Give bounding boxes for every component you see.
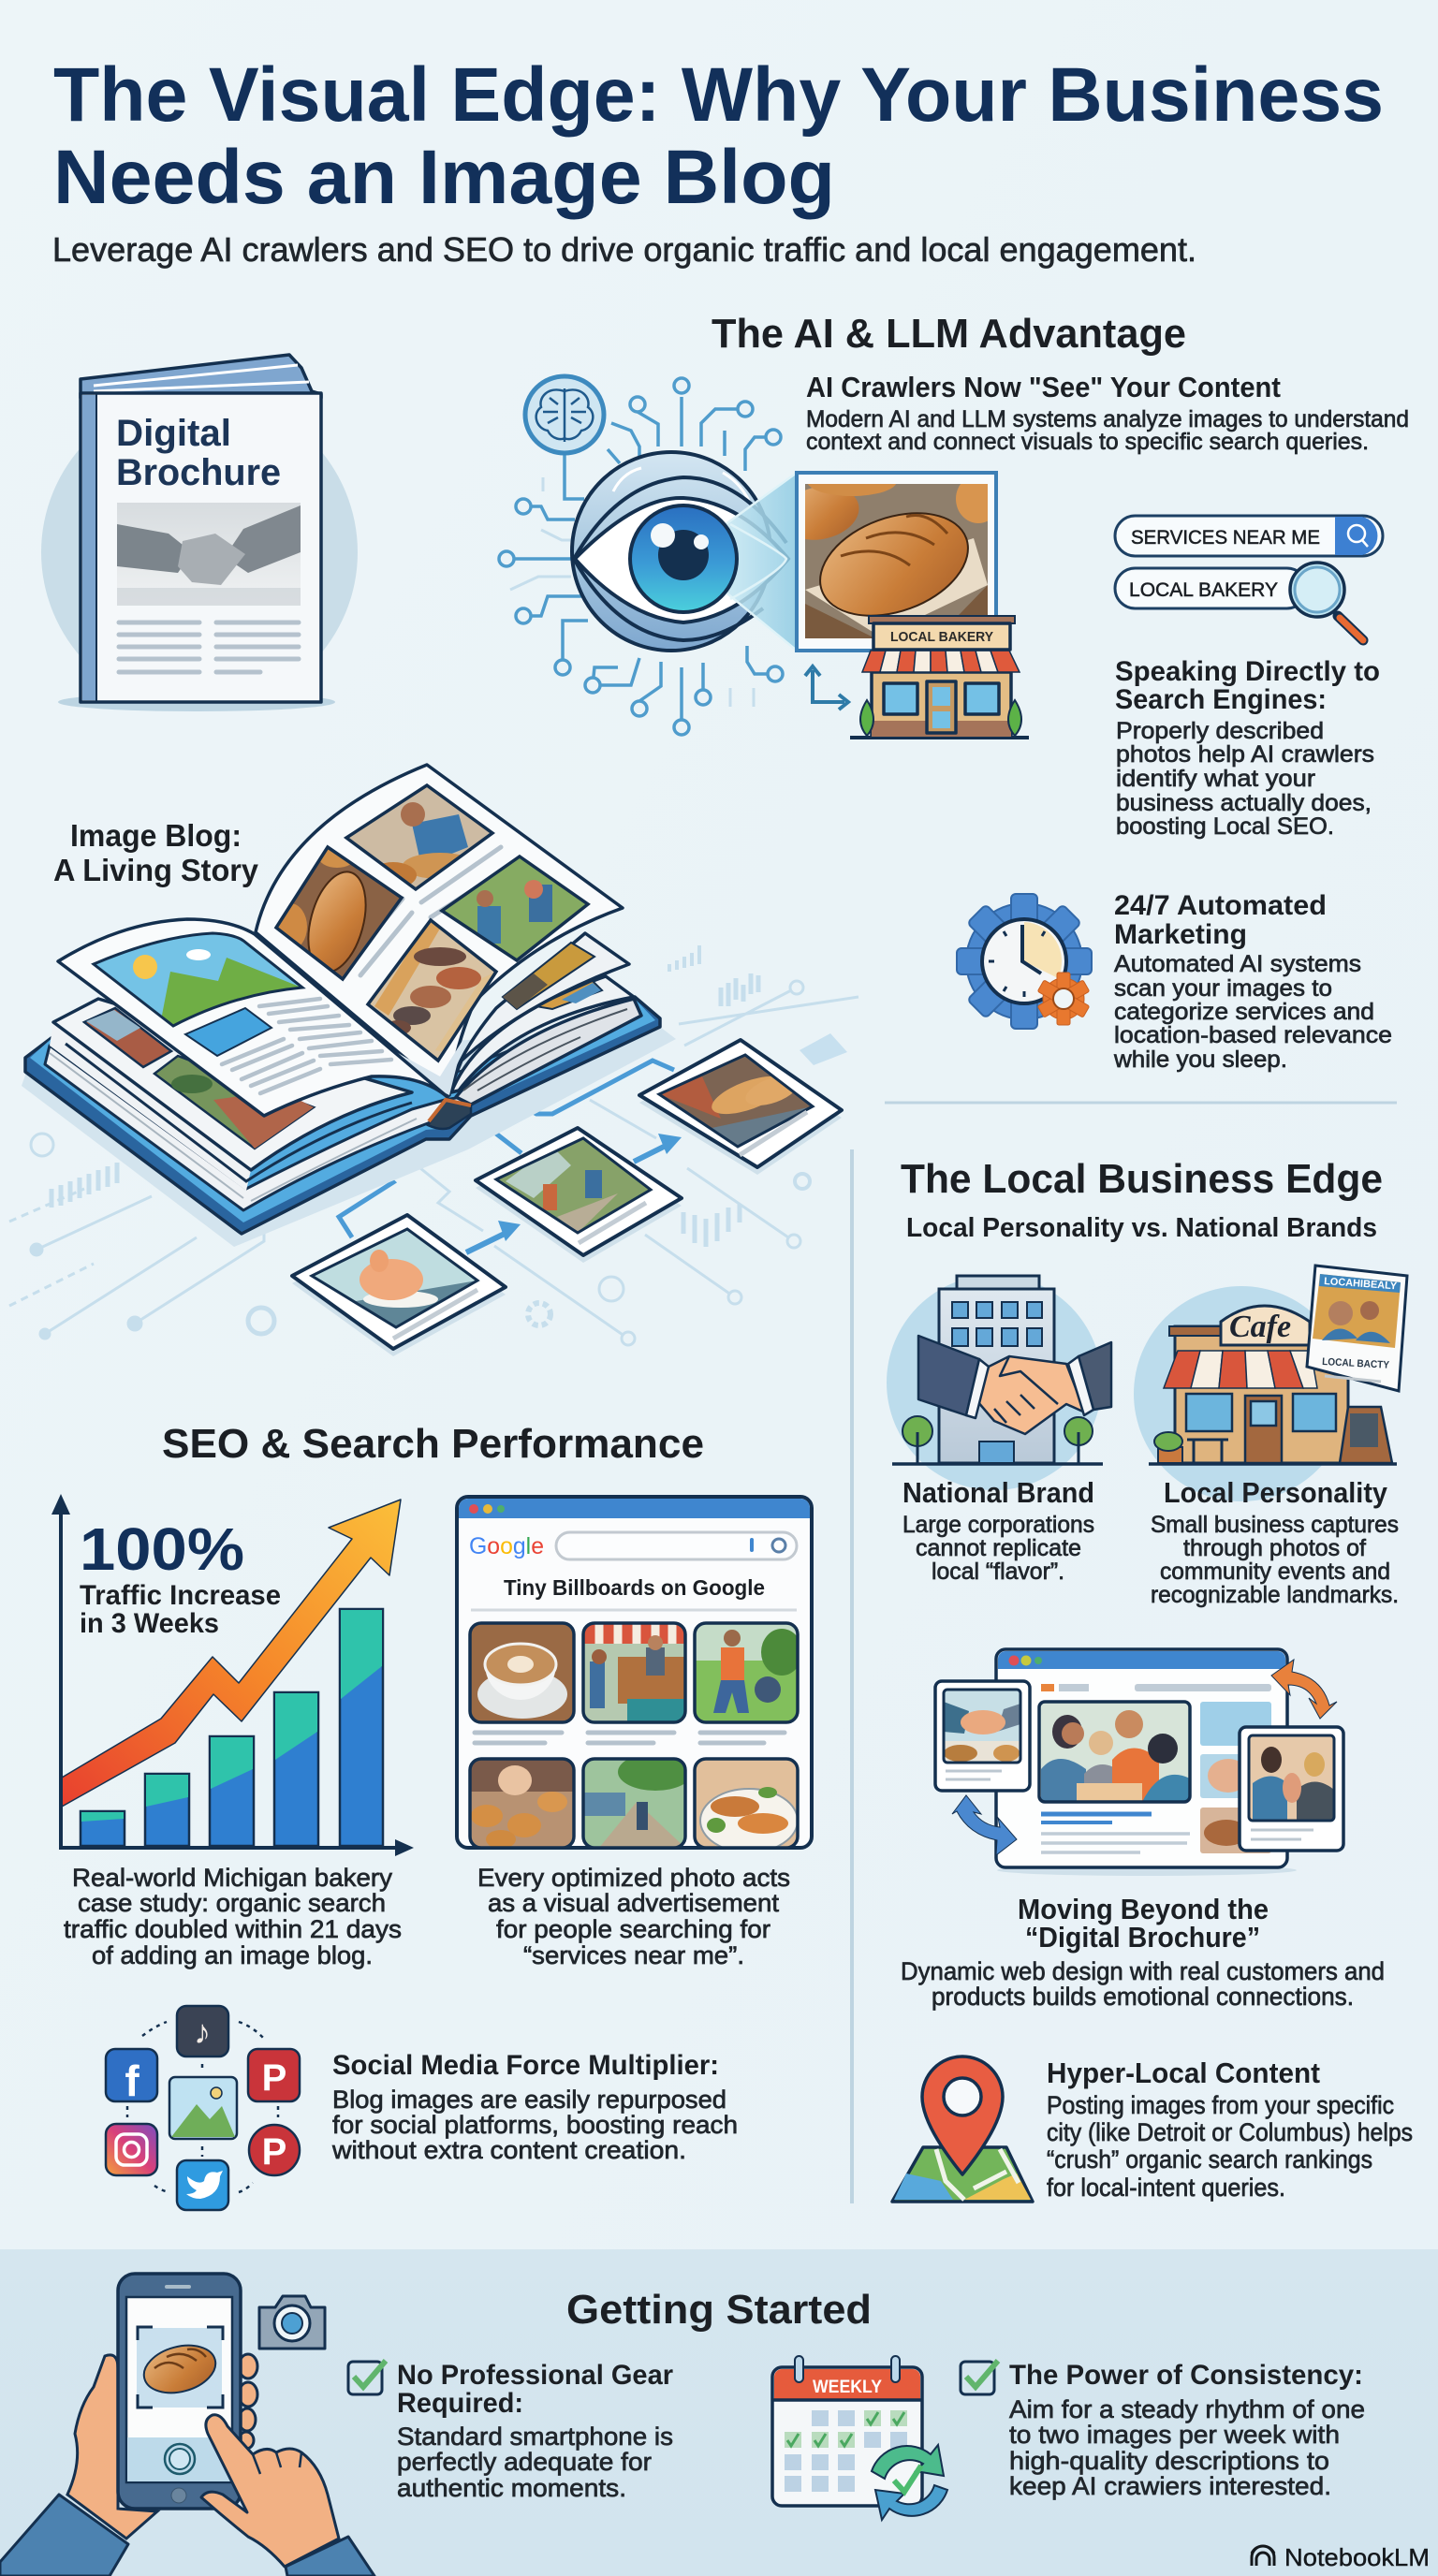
no professional gear text: authentic moments.: [397, 2474, 626, 2502]
checkbox: gear: [348, 2361, 386, 2394]
power of consistency text: Aim for a steady rhythm of one: [1009, 2395, 1365, 2423]
photo: baker: [346, 785, 492, 889]
speaking directly text: [1115, 656, 1380, 840]
icon: pinterest square: P: [262, 2057, 286, 2099]
social text: for social platforms, boosting reach: [332, 2111, 738, 2139]
digital brochure illustration: [41, 355, 358, 711]
hyper-local text: [1047, 2056, 1413, 2202]
local personality text: Local Personality: [1164, 1476, 1388, 1509]
24/7 text: Automated AI systems: [1114, 951, 1361, 977]
image card: bread on table: [639, 1040, 842, 1175]
moving beyond text: Moving Beyond the: [1018, 1893, 1269, 1925]
handshake: [918, 1336, 1111, 1434]
light beam to photo: [701, 473, 797, 651]
heading: local business edge: The Local Business Edge: [901, 1156, 1383, 1202]
chart caption: Real-world Michigan bakery: [72, 1864, 393, 1892]
photo: pastries: [470, 1759, 574, 1849]
image blog open book illustration: [22, 765, 676, 1247]
dynamic website illustration: [935, 1649, 1343, 1876]
image blog label: Image Blog:: [70, 818, 242, 853]
book cover: [25, 997, 660, 1234]
weekly calendar icon: [772, 2356, 947, 2520]
moving beyond text: “Digital Brochure”: [1025, 1921, 1260, 1954]
speaking directly text: identify what your: [1116, 766, 1315, 792]
bars: [81, 1609, 383, 1846]
sky photo: [96, 934, 300, 1024]
subtitle: Leverage AI crawlers and SEO to drive organic traffic and local engagement.: [52, 230, 1196, 269]
Google browser mockup: Tiny Billboards on Google: [504, 1575, 765, 1600]
search pills: [1115, 516, 1383, 640]
page block: [45, 999, 641, 1210]
AI eye illustration with circuits: [499, 376, 797, 735]
stat: 100%: [80, 1515, 244, 1583]
local personality text: [1151, 1476, 1399, 1608]
local bakery storefront: LOCAL BAKERY: [890, 629, 993, 645]
chart caption: [64, 1864, 402, 1969]
title: The Visual Edge: Why Your Business: [53, 52, 1384, 138]
heading: local business edge: Local Personality vs. National Brands: [906, 1213, 1377, 1243]
spine: [428, 1100, 471, 1129]
heading: AI and LLM advantage: The AI & LLM Advantage: [712, 311, 1186, 357]
power of consistency text: [1009, 2360, 1365, 2500]
national brand text: local “flavor”.: [932, 1559, 1064, 1585]
no professional gear text: Required:: [397, 2388, 523, 2419]
brochure title: Brochure: [116, 452, 281, 493]
brochure title: Digital: [116, 413, 231, 454]
iris: [630, 505, 737, 612]
power of consistency text: The Power of Consistency:: [1009, 2360, 1363, 2391]
24/7 text: [1113, 890, 1392, 1073]
chart caption: case study: organic search: [78, 1889, 386, 1917]
browser caption: [477, 1864, 790, 1969]
photo: market stall: [583, 1623, 685, 1722]
speaking directly text: boosting Local SEO.: [1116, 813, 1334, 840]
moving beyond text: [901, 1893, 1385, 2011]
no professional gear text: [397, 2360, 673, 2502]
speaking directly text: business actually does,: [1116, 790, 1372, 816]
24/7 text: location-based relevance: [1114, 1022, 1392, 1048]
stat: [80, 1515, 281, 1639]
photo: garden: [442, 856, 588, 960]
browser caption: for people searching for: [496, 1915, 770, 1943]
magnifier icon: [1290, 563, 1363, 640]
social text: [331, 2050, 738, 2164]
icon: facebook: f: [125, 2056, 139, 2105]
icon: pinterest square: [248, 2049, 300, 2101]
poster: LOCAHIBEALY: [1324, 1276, 1398, 1292]
checkbox: consistency: [961, 2361, 998, 2394]
24/7 text: while you sleep.: [1113, 1046, 1287, 1073]
heading: getting started: Getting Started: [566, 2287, 872, 2333]
chart caption: of adding an image blog.: [92, 1941, 373, 1969]
24/7 text: categorize services and: [1114, 999, 1374, 1025]
social text: Social Media Force Multiplier:: [332, 2050, 719, 2081]
national brand illustration: [887, 1275, 1111, 1490]
heading: SEO: SEO & Search Performance: [162, 1421, 704, 1467]
brain icon: [525, 376, 604, 453]
photo: street: [584, 1760, 683, 1846]
title: [53, 52, 1384, 220]
brochure title: [116, 413, 281, 493]
phone in hands illustration: [0, 2274, 374, 2576]
panel: getting started: [0, 2249, 1438, 2576]
AI crawlers text: AI Crawlers Now "See" Your Content: [806, 371, 1281, 403]
arrow to storefront: [805, 666, 848, 710]
photo: plated food: [697, 1760, 796, 1846]
image blog label: A Living Story: [53, 853, 259, 887]
upper left page: [58, 919, 448, 1116]
search pills: LOCAL BAKERY: [1129, 579, 1278, 601]
bread photo: [139, 2338, 221, 2400]
local bakery storefront: [850, 616, 1029, 738]
lower left page with photos: [53, 999, 412, 1170]
national brand text: cannot replicate: [916, 1535, 1081, 1561]
axes: [61, 1507, 403, 1848]
photo: bread: [278, 850, 399, 977]
bread photo frame: [795, 471, 998, 652]
map pin icon: [892, 2056, 1033, 2202]
right page stack: [456, 999, 641, 1105]
hyper-local text: Posting images from your specific: [1047, 2091, 1394, 2119]
icon: instagram: [106, 2124, 157, 2175]
stat: Traffic Increase: [80, 1580, 281, 1611]
weekly calendar icon: WEEKLY: [813, 2378, 882, 2397]
right card: [1240, 1727, 1343, 1851]
main customer photo: [1039, 1702, 1190, 1802]
local personality text: through photos of: [1183, 1535, 1366, 1561]
icon: tiktok: ♪: [194, 2012, 211, 2051]
24/7 text: scan your images to: [1114, 975, 1332, 1002]
image card: outdoor scene: [476, 1128, 682, 1263]
browser caption: “services near me”.: [523, 1941, 744, 1969]
poster: LOCAL BACTY: [1322, 1356, 1390, 1371]
heading: local business edge: [901, 1156, 1383, 1243]
cafe sign: Cafe: [1229, 1310, 1291, 1344]
eyeball: [572, 452, 788, 651]
lower photo one: [84, 1008, 171, 1067]
AI crawlers text: [806, 371, 1409, 455]
sync arrows: [872, 2445, 947, 2520]
AI crawlers text: Modern AI and LLM systems analyze images to understand: [806, 406, 1409, 432]
national brand text: National Brand: [902, 1476, 1094, 1509]
power of consistency text: keep AI crawiers interested.: [1009, 2472, 1331, 2500]
image card: pastry: [292, 1215, 506, 1356]
power of consistency text: to two images per week with: [1009, 2421, 1340, 2449]
browser caption: as a visual advertisement: [488, 1889, 779, 1917]
left card: [935, 1681, 1030, 1791]
24/7 text: Marketing: [1114, 919, 1247, 950]
NotebookLM logo: NotebookLM: [1284, 2543, 1430, 2571]
lower photo two: [154, 1056, 314, 1149]
no professional gear text: perfectly adequate for: [397, 2448, 652, 2476]
chart caption: traffic doubled within 21 days: [64, 1915, 402, 1943]
brochure handshake photo: [117, 503, 301, 606]
image blog label: [53, 818, 259, 887]
orange arrow: [1271, 1660, 1337, 1719]
blue arrow: [952, 1795, 1017, 1855]
24/7 text: 24/7 Automated: [1114, 890, 1327, 921]
power of consistency text: high-quality descriptions to: [1009, 2447, 1329, 2475]
national brand text: [902, 1476, 1094, 1585]
local personality text: recognizable landmarks.: [1151, 1582, 1399, 1608]
flow arrows: [466, 1134, 682, 1252]
hyper-local text: for local-intent queries.: [1047, 2174, 1285, 2202]
speaking directly text: photos help AI crawlers: [1116, 741, 1374, 768]
icon: pinterest round: [249, 2125, 300, 2175]
photo: latte: [470, 1623, 574, 1722]
blog connector lines: [339, 1061, 674, 1237]
stat: in 3 Weeks: [80, 1608, 219, 1639]
Google logo: Google: [469, 1533, 544, 1559]
growth arrow: [62, 1500, 401, 1807]
icon: facebook: [106, 2049, 157, 2105]
search pills: SERVICES NEAR ME: [1131, 527, 1320, 549]
icon: image: [169, 2077, 237, 2139]
national brand text: Large corporations: [902, 1512, 1094, 1538]
social text: without extra content creation.: [331, 2136, 686, 2164]
hyper-local text: “crush” organic search rankings: [1047, 2145, 1372, 2174]
icon: twitter: [177, 2160, 228, 2210]
title: Needs an Image Blog: [53, 135, 835, 220]
hyper-local text: Hyper-Local Content: [1047, 2056, 1320, 2089]
camera icon: [259, 2296, 325, 2349]
social media icon cluster: [106, 2006, 300, 2210]
AI crawlers text: context and connect visuals to specific search queries.: [806, 429, 1369, 455]
hyper-local text: city (like Detroit or Columbus) helps: [1047, 2118, 1413, 2146]
icon: tiktok: [177, 2006, 228, 2056]
speaking directly text: Search Engines:: [1115, 684, 1327, 715]
local personality text: community events and: [1160, 1559, 1390, 1585]
no professional gear text: Standard smartphone is: [397, 2422, 673, 2451]
social text: Blog images are easily repurposed: [332, 2086, 726, 2114]
gear clock icon: [957, 894, 1092, 1029]
icon: pinterest round: P: [262, 2131, 286, 2173]
Google browser mockup: [457, 1497, 812, 1852]
photo: market: [368, 920, 496, 1061]
speaking directly text: Speaking Directly to: [1115, 656, 1380, 687]
browser caption: Every optimized photo acts: [477, 1864, 790, 1892]
local personality text: Small business captures: [1151, 1512, 1399, 1538]
traffic growth chart: [51, 1494, 414, 1856]
upper right page: [256, 765, 623, 1095]
photo: park cleanup: [695, 1623, 802, 1722]
no professional gear text: No Professional Gear: [397, 2360, 673, 2391]
cafe sign: [1221, 1306, 1310, 1345]
moving beyond text: Dynamic web design with real customers and: [901, 1957, 1385, 1985]
local cafe illustration: [1134, 1266, 1407, 1501]
moving beyond text: products builds emotional connections.: [932, 1983, 1354, 2011]
speaking directly text: Properly described: [1116, 718, 1324, 744]
poster: [1307, 1266, 1407, 1391]
